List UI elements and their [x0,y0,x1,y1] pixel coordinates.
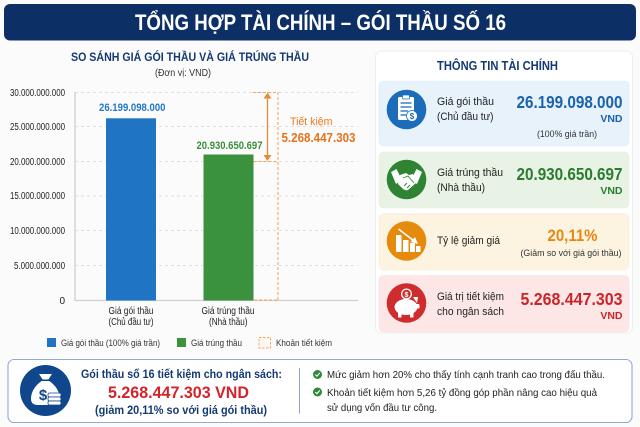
card unit: VND [600,310,623,322]
icon: money bag [20,365,71,416]
bar chart: 5.000.000.000 [14,261,65,272]
bar chart: 30.000.000.000 [10,88,65,99]
card label [437,291,504,318]
card value: 20.930.650.697 [516,164,622,184]
bar chart: 15.000.000.000 [10,191,65,202]
panel: comparison chart [10,49,358,349]
icon: piggy bank: $ [405,292,409,299]
callout note: (giảm 20,11% so với giá gói thầu) [95,405,267,417]
card label: Tỷ lệ giảm giá [437,235,501,247]
card label: (Chủ đầu tư) [437,111,494,123]
chart unit: (Đơn vị: VND) [155,68,211,79]
icon: piggy bank [387,283,426,323]
bar chart: 25.000.000.000 [10,122,65,133]
savings label: Tiết kiệm [290,116,332,128]
panel: financial info [376,51,632,333]
bullet: competition: Mức giảm hơn 20% cho thấy tính cạnh tranh cao trong đấu thầu. [327,369,605,381]
bar: winning price [204,154,254,300]
icon: money bag: $ [39,387,48,404]
card: discount rate [379,214,629,270]
card label: Giá trị tiết kiệm [437,291,504,303]
card: savings value [379,276,629,332]
callout value: 5.268.447.303 VND [108,383,249,402]
legend: Khoản tiết kiệm [276,338,332,349]
card value: 5.268.447.303 [520,289,623,309]
x label: winning price: Giá trúng thầu [202,305,254,317]
x label: winning price: (Nhà thầu) [209,316,248,328]
bar: package price [106,118,156,300]
card note: (Giảm so với giá gói thầu) [520,248,622,259]
icon: falling bar chart [387,221,426,261]
title banner: TỔNG HỢP TÀI CHÍNH – GÓI THẦU SỐ 16 [135,9,506,35]
x label: package price: Giá gói thầu [108,305,154,317]
card unit: VND [600,113,623,125]
bar chart: 0 [59,296,65,307]
bar value: winning price: 20.930.650.697 [196,140,262,152]
card unit: VND [600,185,623,197]
savings bracket [253,92,278,300]
panel: summary callout [8,360,632,422]
card label [437,96,494,123]
legend: Giá trúng thầu [191,338,242,349]
bullet: savings efficiency: Khoản tiết kiệm hơn 5,26 tỷ đồng góp phần nâng cao hiệu quả [327,387,597,399]
card label: (Nhà thầu) [437,182,485,194]
card value: 26.199.098.000 [516,92,623,112]
chart heading: SO SÁNH GIÁ GÓI THẦU VÀ GIÁ TRÚNG THẦU [71,49,309,64]
x label: package price [108,305,154,328]
bar chart: 10.000.000.000 [10,226,65,237]
card label: Giá gói thầu [437,96,494,108]
title banner [4,4,636,40]
panel heading: THÔNG TIN TÀI CHÍNH [437,58,558,73]
callout heading: Gói thầu số 16 tiết kiệm cho ngân sách: [81,369,282,381]
bullet: savings efficiency [313,387,597,414]
legend [47,338,332,349]
bar value: package price: 26.199.098.000 [99,102,166,114]
icon: clipboard with dollar: $ [410,112,415,121]
savings value: 5.268.447.303 [282,130,356,145]
card: package price [379,81,629,146]
legend: Giá gói thầu (100% giá trần) [61,338,160,349]
x label: package price: (Chủ đầu tư) [108,316,154,328]
x label: winning price [202,305,254,328]
card note: (100% giá trần) [537,129,597,140]
bar chart: 20.000.000.000 [10,157,65,168]
card: winning price [379,152,629,208]
card label [437,167,503,194]
icon: handshake [387,160,426,199]
arrow: savings span [264,92,272,161]
bullet: savings efficiency: sử dụng vốn đầu tư công. [327,402,437,414]
bar chart [10,88,358,328]
card label: cho ngân sách [437,306,504,318]
card label: Giá trúng thầu [437,167,503,179]
icon: clipboard with dollar [387,90,426,129]
card value: 20,11% [548,226,598,245]
